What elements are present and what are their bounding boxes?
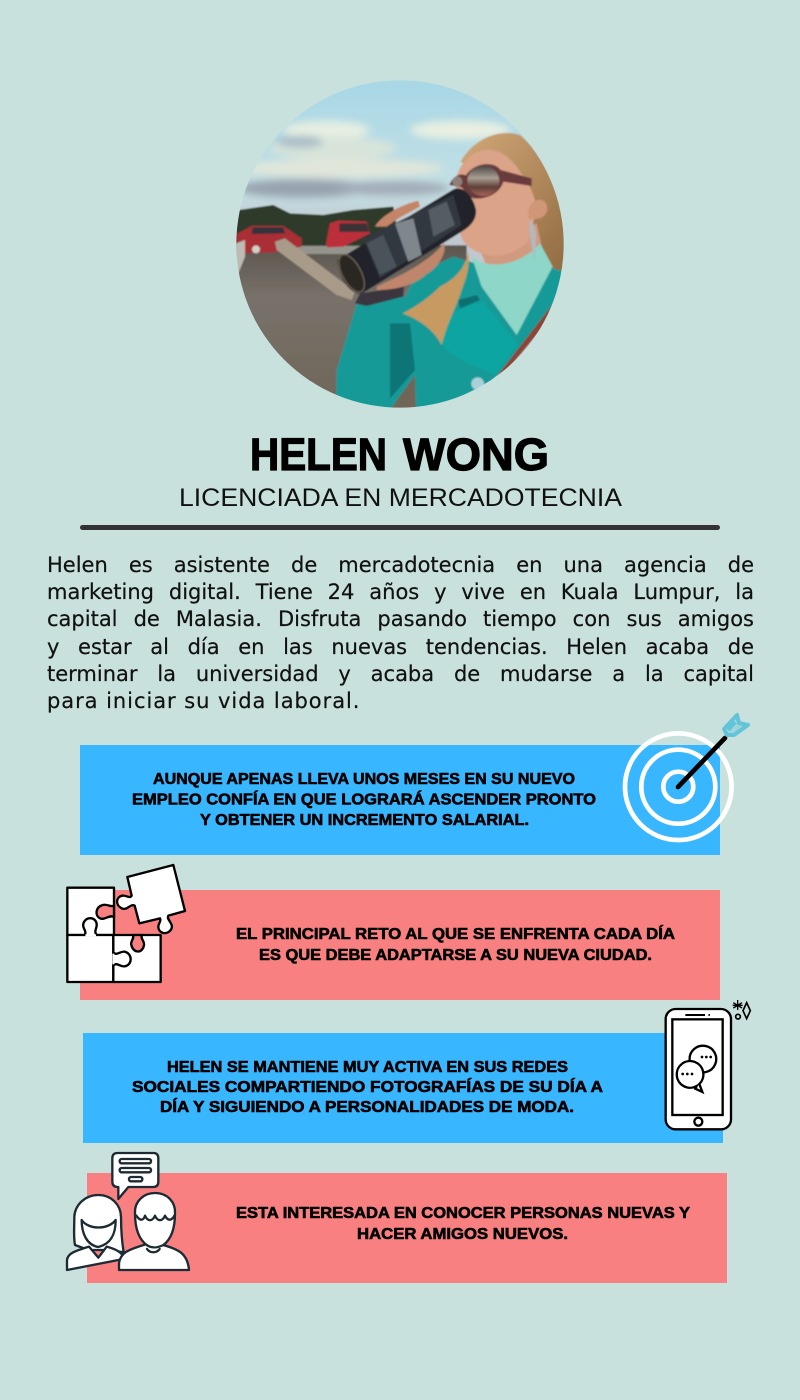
challenge text xyxy=(236,926,675,964)
goal text xyxy=(132,771,596,829)
hair back xyxy=(461,133,569,273)
goal text: EMPLEO CONFÍA EN QUE LOGRARÁ ASCENDER PRONTO xyxy=(132,792,596,808)
social media text: DÍA Y SIGUIENDO A PERSONALIDADES DE MODA. xyxy=(160,1099,574,1116)
panel: interests xyxy=(67,1153,727,1283)
divider xyxy=(80,525,720,530)
icon: two people talking xyxy=(67,1153,189,1270)
woman xyxy=(67,1195,124,1270)
challenge text: EL PRINCIPAL RETO AL QUE SE ENFRENTA CADA DÍA xyxy=(236,926,675,943)
biography text block: terminar la universidad y acaba de mudarse a la capital xyxy=(47,662,754,686)
interests text: ESTA INTERESADA EN CONOCER PERSONAS NUEVAS Y xyxy=(236,1205,691,1222)
speech bubble xyxy=(112,1153,158,1199)
social media text: HELEN SE MANTIENE MUY ACTIVA EN SUS REDES xyxy=(167,1059,568,1076)
bottle xyxy=(337,188,476,293)
social media text: SOCIALES COMPARTIENDO FOTOGRAFÍAS DE SU DÍA A xyxy=(132,1079,603,1096)
scarf xyxy=(472,243,553,335)
biography text block xyxy=(47,553,754,713)
biography text block: y estar al día en las nuevas tendencias. Helen acaba de xyxy=(47,635,754,659)
name heading xyxy=(250,429,549,480)
neck xyxy=(480,223,542,267)
icon: target with arrow xyxy=(625,715,748,840)
interests text xyxy=(236,1205,691,1243)
subtitle: LICENCIADA EN MERCADOTECNIA xyxy=(179,484,622,512)
biography text block: marketing digital. Tiene 24 años y vive en Kuala Lumpur, la xyxy=(47,580,754,604)
goal text: AUNQUE APENAS LLEVA UNOS MESES EN SU NUEVO xyxy=(153,771,575,788)
panel: goal xyxy=(80,715,748,855)
goal text: Y OBTENER UN INCREMENTO SALARIAL. xyxy=(200,812,529,829)
challenge text: ES QUE DEBE ADAPTARSE A SU NUEVA CIUDAD. xyxy=(259,947,652,964)
biography text block: Helen es asistente de mercadotecnia en una agencia de xyxy=(47,553,754,577)
hand xyxy=(375,201,420,227)
social media text xyxy=(132,1059,603,1116)
panel: challenge xyxy=(67,865,720,1000)
sunglasses xyxy=(449,164,532,199)
biography text block: capital de Malasia. Disfruta pasando tiempo con sus amigos xyxy=(47,607,754,631)
photo: woman drinking from coffee bottle xyxy=(236,80,564,408)
icon: smartphone with chat bubbles xyxy=(666,1000,750,1129)
biography text block: para iniciar su vida laboral. xyxy=(47,689,360,713)
interests text: HACER AMIGOS NUEVOS. xyxy=(357,1226,568,1243)
icon: puzzle pieces xyxy=(67,865,185,982)
name heading: WONG xyxy=(403,429,549,480)
coat xyxy=(336,257,567,417)
man xyxy=(119,1193,189,1270)
face xyxy=(453,150,537,256)
panel: social media xyxy=(83,1000,750,1143)
name heading: HELEN xyxy=(250,429,387,480)
